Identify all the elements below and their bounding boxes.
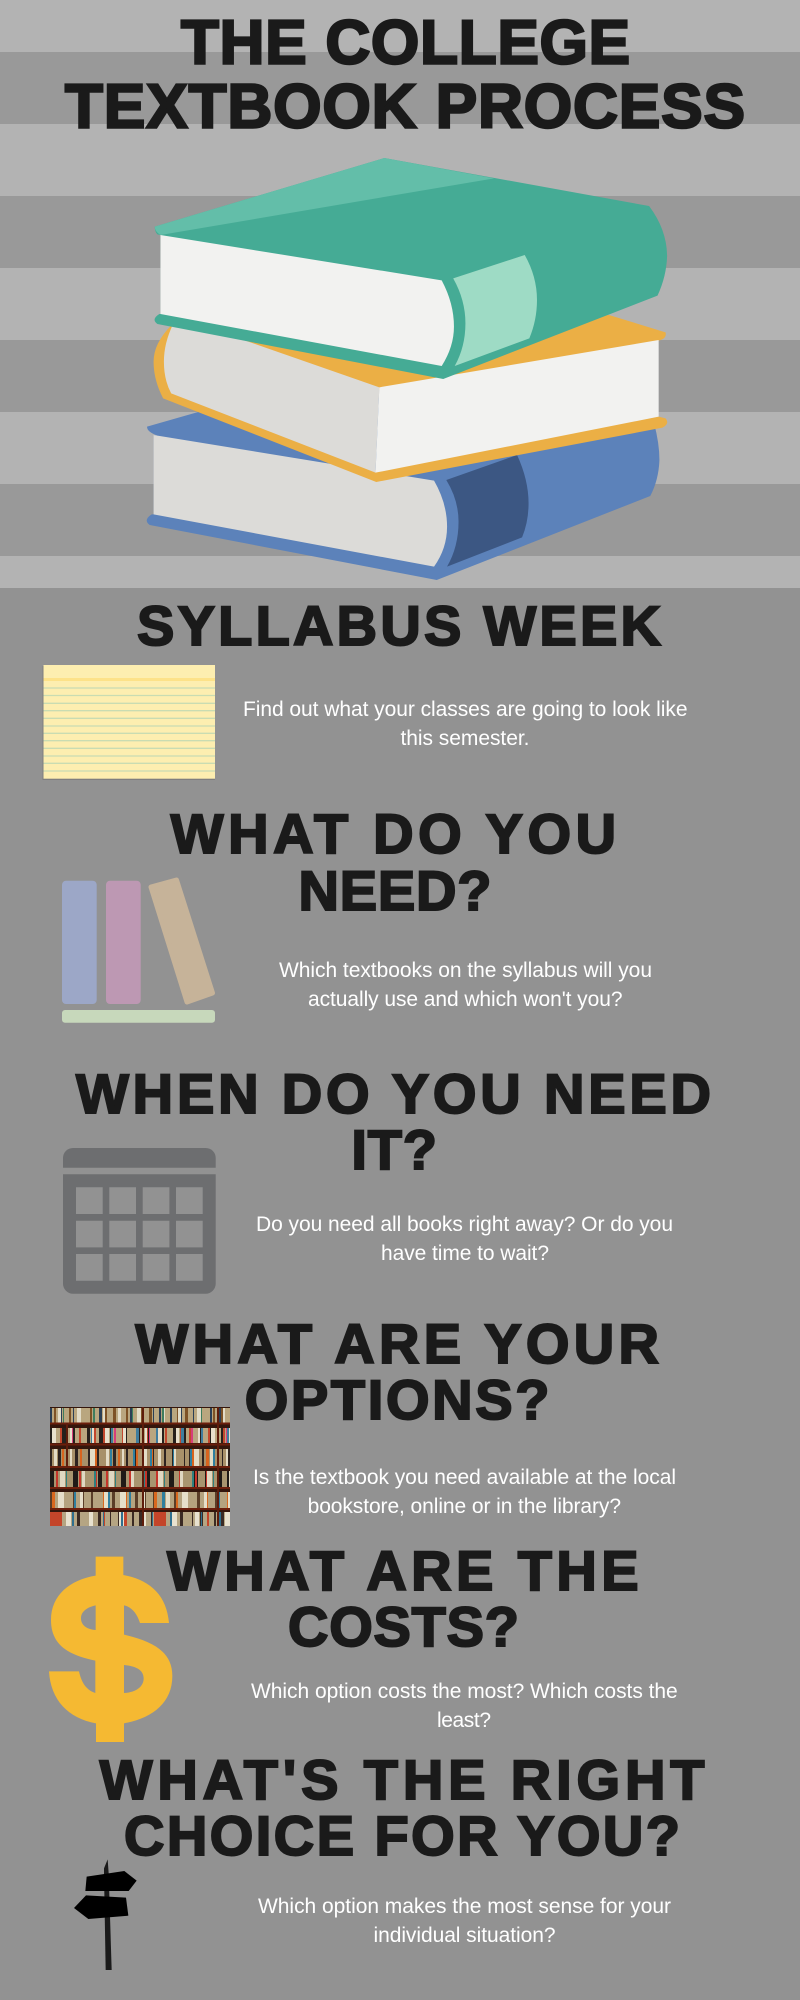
text: what are the costs: least? (437, 1709, 491, 1732)
title: THE COLLEGE (181, 9, 630, 78)
heading: what's the right choice: CHOICE FOR YOU? (124, 1804, 680, 1867)
text: syllabus week: Find out what your classes are going to look like (243, 698, 688, 721)
text: what's the right choice: individual situation? (374, 1924, 556, 1947)
heading: when do you need it (76, 1062, 711, 1181)
heading: what do you need: WHAT DO YOU (171, 802, 616, 865)
text: what are your options: Is the textbook you need available at the local (253, 1466, 676, 1489)
text: what's the right choice: Which option makes the most sense for your (258, 1895, 671, 1918)
text: when do you need it: Do you need all books right away? Or do you (256, 1213, 673, 1236)
icon: calendar (63, 1148, 216, 1294)
image: bookshelf (50, 1407, 230, 1526)
book: blue, bottom (147, 397, 659, 580)
heading: what are the costs: COSTS? (288, 1595, 519, 1658)
heading: what do you need: NEED? (298, 859, 492, 922)
panel: what are your options (50, 1312, 676, 1526)
heading: what are the costs: WHAT ARE THE (167, 1539, 639, 1602)
illustration: stack of three books (147, 158, 667, 580)
title (65, 9, 745, 142)
panel: what do you need (62, 802, 652, 1023)
text: when do you need it: have time to wait? (381, 1242, 549, 1265)
heading: syllabus week: SYLLABUS WEEK (137, 594, 661, 657)
title: TEXTBOOK PROCESS (65, 73, 745, 142)
text: what are your options (253, 1466, 676, 1518)
heading: what do you need (171, 802, 616, 922)
book: orange, middle (154, 315, 667, 482)
text: what do you need: actually use and which won't you? (308, 988, 622, 1011)
heading: what's the right choice (100, 1748, 705, 1867)
text: syllabus week (243, 698, 688, 750)
icon: yellow notepad (42, 665, 215, 780)
text: what are the costs: Which option costs the most? Which costs the (251, 1680, 678, 1703)
text: what do you need (279, 959, 652, 1011)
panel: syllabus week (42, 594, 688, 780)
text: what do you need: Which textbooks on the syllabus will you (279, 959, 652, 982)
heading: what are your options (135, 1312, 659, 1431)
icon: books on shelf (62, 880, 215, 1023)
heading: what's the right choice: WHAT'S THE RIGHT (100, 1748, 705, 1811)
text: what are your options: bookstore, online or in the library? (308, 1495, 621, 1518)
heading: what are your options: OPTIONS? (245, 1368, 549, 1431)
text: syllabus week: this semester. (400, 727, 530, 750)
heading: when do you need it: IT? (351, 1118, 437, 1181)
text: what are the costs (251, 1680, 678, 1732)
panel: when do you need it (63, 1062, 711, 1294)
heading: when do you need it: WHEN DO YOU NEED (76, 1062, 711, 1125)
panel: what's the right choice (74, 1748, 704, 1970)
panel: what are the costs (49, 1539, 678, 1742)
icon: dollar sign (49, 1557, 172, 1742)
text: what's the right choice (258, 1895, 671, 1947)
book: green, top (155, 158, 667, 379)
text: when do you need it (256, 1213, 673, 1265)
icon: signpost (74, 1859, 137, 1970)
heading: what are your options: WHAT ARE YOUR (135, 1312, 659, 1375)
heading: what are the costs (167, 1539, 639, 1658)
